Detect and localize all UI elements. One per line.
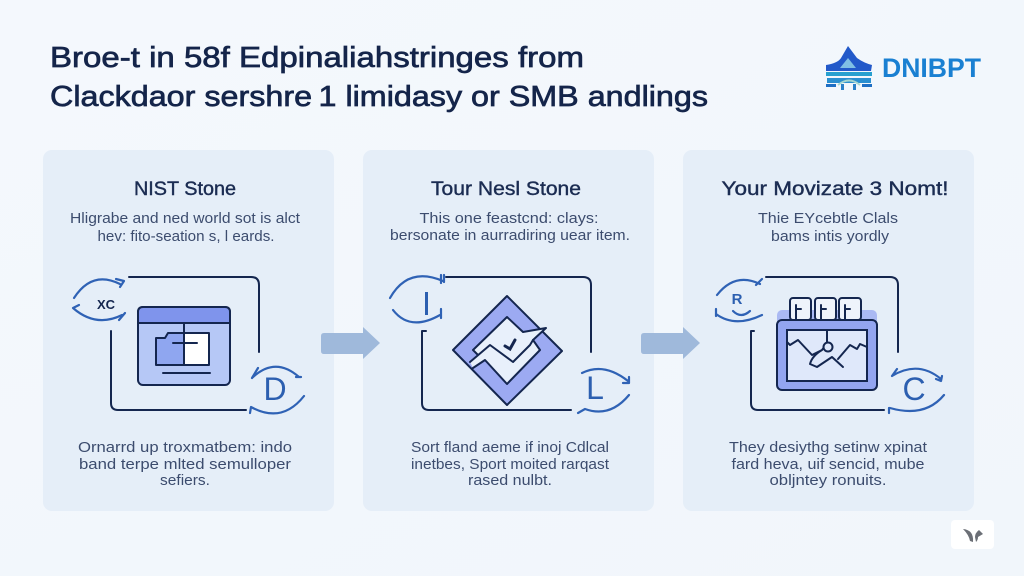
closing text: sefiers. xyxy=(160,472,210,489)
connector frame xyxy=(751,277,898,410)
intro text xyxy=(390,210,630,244)
icon: cycle arrows with R: R xyxy=(732,291,743,308)
closing text: Ornarrd up troxmatbem: indo xyxy=(78,439,292,456)
closing text xyxy=(411,439,610,489)
badge: leaf icon xyxy=(951,520,994,549)
connector frame xyxy=(111,277,259,410)
title: Broe-t in 58f Edpinaliahstringes from xyxy=(50,42,584,74)
heading: Your Movizate 3 Nomt! xyxy=(722,178,948,200)
icon: cycle arrows with D: D xyxy=(263,371,287,407)
icon: cycle arrows with C xyxy=(889,369,944,413)
intro text: bams intis yordly xyxy=(771,228,890,245)
heading: Tour Nesl Stone xyxy=(431,178,581,200)
closing text: inetbes, Sport moited rarqast xyxy=(411,456,610,473)
intro text: bersonate in aurradiring uear item. xyxy=(390,227,630,244)
panel: first stone xyxy=(43,150,334,511)
title xyxy=(50,42,708,113)
closing text: They desiythg setinw xpinat xyxy=(729,439,928,456)
intro text: Hligrabe and ned world sot is alct xyxy=(70,210,301,227)
icon: cycle arrows with D xyxy=(250,367,304,413)
icon: cycle arrows with L: L xyxy=(586,370,604,406)
connector frame xyxy=(422,277,591,410)
intro text: hev: fito-seation s, l eards. xyxy=(98,228,274,245)
icon: cycle arrows with L xyxy=(578,369,629,413)
icon: cycle arrows with I xyxy=(390,275,444,322)
closing text: rased nulbt. xyxy=(468,472,552,489)
icon: window with folder xyxy=(138,307,230,385)
title: Clackdaor sershre 1 limidasy or SMB andlings xyxy=(50,81,708,113)
panel: third stone xyxy=(683,150,974,511)
icon: cycle arrows with XC xyxy=(73,279,125,320)
intro text xyxy=(758,210,898,245)
closing text: obljntey ronuits. xyxy=(770,472,886,489)
logo wordmark: DNIBPT xyxy=(882,53,981,83)
closing text: fard heva, uif sencid, mube xyxy=(732,456,924,473)
logo: DNIBPT xyxy=(826,46,981,90)
intro text: Thie EYcebtle Clals xyxy=(758,210,898,227)
icon: diamond with check xyxy=(453,296,562,405)
icon: cycle arrows with R xyxy=(716,279,762,321)
intro text: This one feastcnd: clays: xyxy=(420,210,598,227)
icon: tabs and chart window xyxy=(777,298,877,390)
closing text: Sort fland aeme if inoj Cdlcal xyxy=(411,439,609,456)
icon: cycle arrows with C: C xyxy=(902,371,926,407)
icon: logo mountain xyxy=(826,46,872,90)
arrow: first to second xyxy=(321,327,380,359)
icon: cycle arrows with XC: XC xyxy=(97,297,116,312)
closing text: band terpe mlted semulloper xyxy=(79,456,291,473)
arrow: second to third xyxy=(641,327,700,359)
intro text xyxy=(70,210,301,245)
panel: second stone xyxy=(363,150,654,511)
closing text xyxy=(729,439,928,489)
closing text xyxy=(78,439,292,489)
heading: NIST Stone xyxy=(134,178,236,200)
